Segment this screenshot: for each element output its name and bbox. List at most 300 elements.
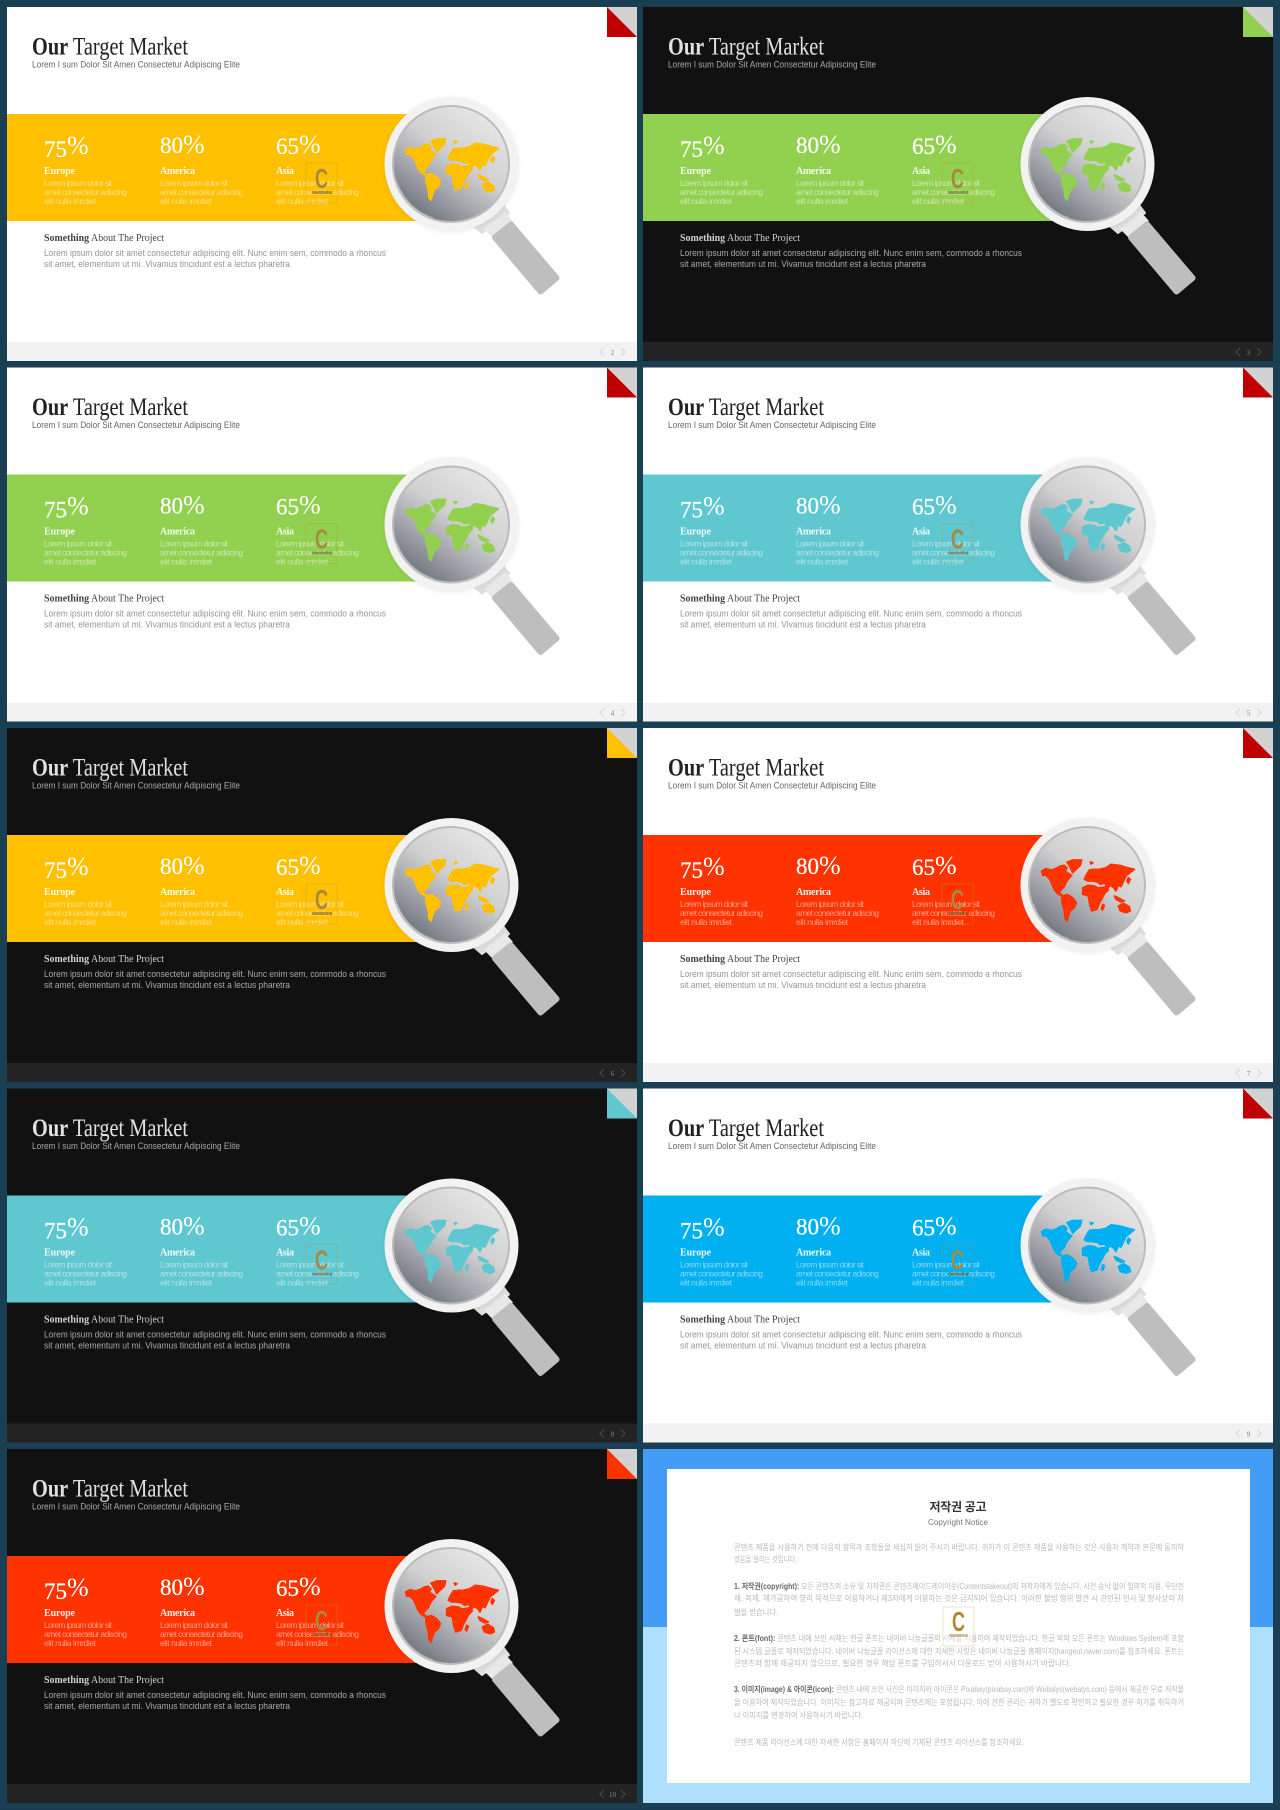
stat: America <box>160 1212 243 1288</box>
subheading: Lorem I sum Dolor Sit Amen Consectetur Adipiscing Elite <box>32 1502 240 1512</box>
watermark: C <box>315 1244 328 1276</box>
stat: Europe: Lorem ipsum dolor sit <box>44 1260 113 1270</box>
stat: Asia: % <box>299 1212 321 1240</box>
colour band <box>7 835 427 942</box>
corner fold <box>607 728 637 758</box>
project text: Lorem ipsum dolor sit amet consectetur adipiscing elit. Nunc enim sem, commodo a rhoncus <box>44 1690 386 1701</box>
stat: America: Lorem ipsum dolor sit <box>160 538 229 548</box>
stat: Asia: 65 <box>276 855 299 880</box>
corner fold <box>1243 7 1273 37</box>
stat: Europe <box>44 131 127 206</box>
project text <box>680 969 1022 991</box>
stat: Asia: Asia <box>276 1608 294 1619</box>
colour band <box>7 1196 427 1302</box>
project text: sit amet, elementum ut mi. Vivamus tincidunt est a lectus pharetra <box>44 259 291 270</box>
stat: Europe: 75 <box>44 137 67 162</box>
stat: Europe: Lorem ipsum dolor sit <box>44 178 113 188</box>
corner fold <box>607 7 637 37</box>
stat: Asia <box>912 851 995 927</box>
project text <box>44 1690 386 1712</box>
stat: Europe: elit nulla imrdiet <box>680 196 733 206</box>
footer with page number <box>643 1063 1273 1082</box>
watermark <box>306 884 337 924</box>
watermark: C <box>315 524 328 554</box>
slide 3: dark green <box>643 7 1273 361</box>
stat: America: elit nulla imrdiet <box>796 917 849 927</box>
section 3: image and icon: 을 이용하여 제작되었습니다. 이미지는 참고자료 제공되며 콘텐츠에는 포함됩니다. 이에 관한 권리는 귀하가 별도로 확인하고 필요한 경우 허가를 취득하거 <box>734 1697 1184 1707</box>
stat: Europe: % <box>67 1212 89 1242</box>
watermark: C <box>315 163 328 194</box>
stat: Europe: % <box>703 1212 725 1242</box>
project heading: Something About The Project <box>680 954 800 965</box>
stat: America: Lorem ipsum dolor sit <box>796 899 865 909</box>
heading: Our Target Market <box>32 754 188 782</box>
section 3: image and icon: 나 이미지를 변경하여 사용하시기 바랍니다. <box>734 1710 863 1720</box>
stat: Europe: Europe <box>44 1248 76 1258</box>
project text: Lorem ipsum dolor sit amet consectetur adipiscing elit. Nunc enim sem, commodo a rhoncus <box>680 248 1022 259</box>
stat: Asia: 65 <box>276 494 299 520</box>
subheading: Lorem I sum Dolor Sit Amen Consectetur Adipiscing Elite <box>32 780 240 790</box>
stat: Asia: amet consectetur adiscing <box>276 187 359 197</box>
stat: America: America <box>796 526 831 538</box>
stat: America: Lorem ipsum dolor sit <box>160 899 229 909</box>
stat: America: Lorem ipsum dolor sit <box>796 538 865 548</box>
stat: Asia <box>276 1572 359 1648</box>
project text <box>44 969 386 991</box>
watermark <box>306 524 337 564</box>
corner fold <box>1243 1088 1273 1118</box>
stat: America: Lorem ipsum dolor sit <box>160 1620 229 1630</box>
stat: Europe: % <box>703 492 725 520</box>
slide 10: dark orange-red <box>7 1449 637 1803</box>
section 1: copyright: 벌을 받습니다. <box>734 1607 778 1617</box>
stat: America: Lorem ipsum dolor sit <box>796 178 865 188</box>
stat: Asia: 65 <box>912 494 935 520</box>
subheading: Lorem I sum Dolor Sit Amen Consectetur Adipiscing Elite <box>668 1141 876 1151</box>
stat: Europe: elit nulla imrdiet <box>680 1278 733 1288</box>
stat: Europe: Europe <box>680 887 712 898</box>
stat: Europe: Europe <box>680 526 712 538</box>
stat: Asia: amet consectetur adiscing <box>912 548 995 558</box>
intro paragraph: 셨음을 알리는 것입니다. <box>734 1554 797 1564</box>
project text: sit amet, elementum ut mi. Vivamus tincidunt est a lectus pharetra <box>680 980 927 991</box>
watermark: C <box>951 884 964 915</box>
stat: America: elit nulla imrdiet <box>796 556 849 566</box>
stat: Asia: amet consectetur adiscing <box>276 1268 359 1278</box>
stat: Asia: Asia <box>912 1248 930 1258</box>
watermark <box>306 1605 337 1645</box>
stat: America: 80% <box>160 130 205 159</box>
footer with page number: 8 <box>611 1430 615 1438</box>
copyright notice slide <box>643 1449 1273 1803</box>
notice subtitle: Copyright Notice <box>928 1517 988 1527</box>
stat: America: America <box>160 166 195 177</box>
intro paragraph: 콘텐츠 제품을 사용하기 전에 다음의 항목과 조항들을 세심히 읽어 주시기 바랍니다. 귀하가 이 콘텐츠 제품을 사용하는 것은 사용자 계약과 본문에 동의하 <box>734 1542 1185 1552</box>
magnifier with world map <box>1020 1178 1192 1373</box>
stat: Europe: amet consectetur adiscing <box>680 908 763 918</box>
stat: Europe: amet consectetur adiscing <box>44 908 127 918</box>
stat: America: elit nulla imrdiet <box>160 917 213 927</box>
section 1: copyright: 1. 저작권(copyright): 모든 콘텐츠의 소유 및 저작권은 콘텐츠메이드레이아웃(Contentstakeout)의 저작자에게 있습니다. 사전 승낙 없이 임의적 이용, 무단전 <box>734 1581 1184 1591</box>
subheading: Lorem I sum Dolor Sit Amen Consectetur Adipiscing Elite <box>668 420 876 430</box>
closing line: 콘텐츠 제품 라이선스에 대한 자세한 사항은 홈페이지 하단에 기재된 콘텐츠 라이선스를 참조하세요. <box>734 1737 1024 1747</box>
heading: Our Target Market <box>32 1476 188 1502</box>
stat: Europe: elit nulla imrdiet <box>44 1638 97 1648</box>
project text <box>680 248 1022 270</box>
section 3: image and icon: 3. 이미지(image) & 아이콘(icon): 콘텐츠 내에 쓰인 사진은 이미지와 아이콘은 Pixabay(pixabay.com)와 Webalys(webalys.com) 등에서 제공한 무료 저작물 <box>734 1684 1184 1694</box>
stat: Asia: Asia <box>912 526 930 538</box>
colour band <box>643 1196 1063 1302</box>
stat: Asia <box>276 1212 359 1288</box>
project text: Lorem ipsum dolor sit amet consectetur adipiscing elit. Nunc enim sem, commodo a rhoncus <box>680 969 1022 980</box>
footer with page number <box>643 702 1273 722</box>
stat: America: elit nulla imrdiet <box>796 196 849 206</box>
stat: Europe: 75 <box>44 1218 67 1244</box>
stat: Asia: amet consectetur adiscing <box>276 908 359 918</box>
footer with page number <box>7 342 637 361</box>
project text <box>680 1330 1022 1352</box>
footer with page number <box>7 702 637 722</box>
corner fold <box>607 1088 637 1118</box>
notice panel <box>667 1469 1250 1783</box>
colour band <box>643 835 1063 942</box>
stat: America <box>796 130 879 206</box>
stat: Europe: amet consectetur adiscing <box>44 1268 127 1278</box>
corner fold <box>1243 368 1273 398</box>
stat: Europe: amet consectetur adiscing <box>680 548 763 558</box>
stat: Asia: elit nulla imrdiet <box>276 1638 329 1648</box>
project text: Lorem ipsum dolor sit amet consectetur adipiscing elit. Nunc enim sem, commodo a rhoncus <box>44 969 386 980</box>
footer with page number: 9 <box>1247 1430 1251 1438</box>
watermark: C <box>952 1606 965 1637</box>
stat: Asia: Lorem ipsum dolor sit <box>276 1260 345 1270</box>
stat: Asia: Lorem ipsum dolor sit <box>912 178 981 188</box>
heading: Our Target Market <box>668 1115 824 1142</box>
project heading: Something About The Project <box>680 1314 800 1326</box>
stat: Europe: 75 <box>44 1579 67 1604</box>
heading: Our Target Market <box>32 34 188 60</box>
stat: Europe: elit nulla imrdiet <box>680 917 733 927</box>
stat: America <box>796 851 879 927</box>
stat: America: 80% <box>160 851 205 880</box>
stat: Europe: amet consectetur adiscing <box>44 548 127 558</box>
stat: America: America <box>796 166 831 177</box>
stat: America: 80% <box>796 851 841 880</box>
stat: Europe: 75 <box>680 858 703 883</box>
watermark: C <box>315 1605 328 1636</box>
stat: Asia: elit nulla imrdiet <box>912 917 965 927</box>
stat: America: 80% <box>160 1212 205 1240</box>
stat: Europe: elit nulla imrdiet <box>44 1278 97 1288</box>
stat: Europe: Europe <box>680 1248 712 1258</box>
section 3: image and icon <box>734 1684 1184 1720</box>
watermark <box>942 1244 973 1284</box>
project text: Lorem ipsum dolor sit amet consectetur adipiscing elit. Nunc enim sem, commodo a rhoncus <box>44 1330 386 1340</box>
stat: Asia: % <box>299 130 321 159</box>
footer with page number <box>7 1063 637 1082</box>
stat: Asia: elit nulla imrdiet <box>276 917 329 927</box>
stat: Asia: Asia <box>276 526 294 538</box>
footer with page number: 10 <box>609 1791 616 1799</box>
project heading: Something About The Project <box>44 233 164 244</box>
stat: Europe: 75 <box>680 137 703 162</box>
stat: Asia: % <box>935 851 957 880</box>
project heading: Something About The Project <box>680 233 800 244</box>
slide 9: white blue <box>643 1088 1273 1442</box>
project heading: Something About The Project <box>44 594 164 604</box>
stat: Europe: % <box>67 492 89 520</box>
heading: Our Target Market <box>668 754 824 782</box>
stat: Asia: amet consectetur adiscing <box>912 908 995 918</box>
stat: Europe: elit nulla imrdiet <box>44 556 97 566</box>
stat: America: America <box>160 1248 195 1258</box>
stat: Europe: % <box>703 852 725 881</box>
stat: Europe: % <box>67 1573 89 1602</box>
slide 7: white orange-red <box>643 728 1273 1082</box>
section 2: font <box>734 1633 1185 1668</box>
stat: Europe: Europe <box>680 166 712 177</box>
stat: Asia: % <box>935 130 957 159</box>
stat: America: elit nulla imrdiet <box>796 1278 849 1288</box>
stat: America <box>160 490 243 566</box>
stat: Asia: % <box>299 490 321 520</box>
stat: Asia <box>912 130 995 206</box>
stat: Asia: Lorem ipsum dolor sit <box>276 1620 345 1630</box>
stat: Asia <box>912 1212 995 1288</box>
stat: Asia: 65 <box>912 134 935 159</box>
stat: America: America <box>796 1248 831 1258</box>
stat: Asia: 65 <box>276 134 299 159</box>
slide 6: dark yellow <box>7 728 637 1082</box>
two-tone background <box>643 1449 1273 1803</box>
stat: Asia: % <box>935 490 957 520</box>
stat: Europe: amet consectetur adiscing <box>44 1629 127 1639</box>
project heading: Something About The Project <box>44 1675 164 1686</box>
stat: Europe: elit nulla imrdiet <box>44 196 97 206</box>
stat: America <box>796 490 879 566</box>
stat: America: amet consectetur adiscing <box>796 187 879 197</box>
stat: Europe <box>44 1212 127 1288</box>
stat: Asia <box>276 490 359 566</box>
footer with page number: 5 <box>1247 710 1251 718</box>
stat: America: America <box>160 1608 195 1619</box>
stat: Asia: elit nulla imrdiet <box>912 556 965 566</box>
stat: Europe: Europe <box>44 1608 76 1619</box>
stat: America: America <box>160 526 195 538</box>
subheading: Lorem I sum Dolor Sit Amen Consectetur Adipiscing Elite <box>668 60 876 70</box>
magnifier with world map <box>1020 97 1192 292</box>
stat: America: amet consectetur adiscing <box>160 548 243 558</box>
intro paragraph <box>734 1542 1185 1564</box>
project heading: Something About The Project <box>680 594 800 604</box>
footer with page number <box>7 1424 637 1442</box>
stat: America: 80% <box>160 490 205 520</box>
subheading: Lorem I sum Dolor Sit Amen Consectetur Adipiscing Elite <box>32 60 240 70</box>
stat: America: America <box>796 887 831 898</box>
colour band <box>7 474 427 582</box>
watermark <box>943 1606 974 1646</box>
stat: Europe <box>680 852 763 927</box>
stat: Europe: elit nulla imrdiet <box>44 917 97 927</box>
footer with page number: 2 <box>611 349 615 357</box>
stat: Europe: Europe <box>44 887 76 898</box>
stat: Europe: Lorem ipsum dolor sit <box>44 538 113 548</box>
stat: Europe: % <box>67 852 89 881</box>
stat: Asia <box>912 490 995 566</box>
stat: Europe <box>44 852 127 927</box>
heading: Our Target Market <box>668 394 824 421</box>
section 1: copyright <box>734 1581 1184 1617</box>
stat: America: America <box>160 887 195 898</box>
project text: sit amet, elementum ut mi. Vivamus tincidunt est a lectus pharetra <box>44 620 291 630</box>
stat: Europe: 75 <box>680 1218 703 1244</box>
stat: Asia: Lorem ipsum dolor sit <box>276 538 345 548</box>
heading: Our Target Market <box>32 394 188 421</box>
subheading: Lorem I sum Dolor Sit Amen Consectetur Adipiscing Elite <box>32 1141 240 1151</box>
section 2: font: 된 시스템 글꼴로 제작되었습니다. 네이버 나눔글꼴 라이선스에 대한 자세한 사항은 네이버 나눔글꼴 홈페이지(hangeul.naver.com)를 참조하세요. 폰트는 <box>734 1646 1184 1656</box>
stat: America: Lorem ipsum dolor sit <box>160 178 229 188</box>
section 1: copyright: 재, 복제, 재가공하여 영리 목적으로 이용하거나 제3자에게 이용하는 것은 금지되어 있습니다. 이러한 불법 행위 발견 시 관련된 민사 및 형사상의 처 <box>734 1593 1184 1603</box>
stat: Asia <box>276 851 359 927</box>
watermark <box>306 1244 337 1284</box>
stat: Europe: % <box>703 131 725 160</box>
corner fold <box>607 368 637 398</box>
footer with page number <box>7 1784 637 1803</box>
stat: Asia: Lorem ipsum dolor sit <box>912 899 981 909</box>
magnifier with world map <box>384 818 556 1012</box>
stat: Europe: Lorem ipsum dolor sit <box>680 538 749 548</box>
stat: America: amet consectetur adiscing <box>796 548 879 558</box>
colour band <box>7 1556 427 1663</box>
stat: America: elit nulla imrdiet <box>160 1278 213 1288</box>
stat: Asia: % <box>935 1212 957 1240</box>
stat: Asia: Asia <box>276 887 294 898</box>
subheading: Lorem I sum Dolor Sit Amen Consectetur Adipiscing Elite <box>32 420 240 430</box>
magnifier with world map <box>384 1539 556 1734</box>
stat: Europe <box>680 131 763 206</box>
stat: America: amet consectetur adiscing <box>796 1268 879 1278</box>
heading: Our Target Market <box>668 34 824 60</box>
stat: Asia: elit nulla imrdiet <box>276 1278 329 1288</box>
stat: America: 80% <box>796 130 841 159</box>
stat: Asia <box>276 130 359 206</box>
section 2: font: 콘텐츠와 함께 제공되지 않으므로, 필요한 경우 해당 폰트를 구입하셔서 다운로드 받아 사용하시기 바랍니다. <box>734 1658 1071 1668</box>
stat: Asia: amet consectetur adiscing <box>276 1629 359 1639</box>
stat: America: 80% <box>796 1212 841 1240</box>
project text <box>44 248 386 270</box>
stat: Asia: Asia <box>912 887 930 898</box>
stat: Asia: Asia <box>912 166 930 177</box>
project text: Lorem ipsum dolor sit amet consectetur adipiscing elit. Nunc enim sem, commodo a rhoncus <box>680 608 1022 620</box>
colour band <box>643 114 1063 221</box>
footer with page number: 4 <box>611 710 615 718</box>
stat: America: 80% <box>796 490 841 520</box>
stat: Europe: Europe <box>44 526 76 538</box>
stat: Asia: elit nulla imrdiet <box>276 556 329 566</box>
footer with page number: 6 <box>611 1070 615 1078</box>
stat: America: amet consectetur adiscing <box>160 1629 243 1639</box>
project text <box>44 1330 386 1352</box>
project text: sit amet, elementum ut mi. Vivamus tincidunt est a lectus pharetra <box>680 1340 927 1352</box>
watermark: C <box>951 1244 964 1276</box>
stat: Europe: Europe <box>44 166 76 177</box>
stat: Europe <box>680 1212 763 1288</box>
stat: Asia: amet consectetur adiscing <box>912 187 995 197</box>
stat: America <box>160 130 243 206</box>
stat: America: Lorem ipsum dolor sit <box>796 1260 865 1270</box>
stat: Europe: Lorem ipsum dolor sit <box>44 1620 113 1630</box>
stat: Asia: Asia <box>276 166 294 177</box>
stat: Europe <box>44 492 127 566</box>
heading: Our Target Market <box>32 1115 188 1142</box>
watermark <box>306 163 337 203</box>
stat: America: elit nulla imrdiet <box>160 196 213 206</box>
project heading: Something About The Project <box>44 954 164 965</box>
stat: Asia: Lorem ipsum dolor sit <box>276 899 345 909</box>
stat: Europe: amet consectetur adiscing <box>44 187 127 197</box>
footer with page number <box>643 1424 1273 1442</box>
watermark: C <box>951 163 964 194</box>
stat: Asia: amet consectetur adiscing <box>912 1268 995 1278</box>
stat: Europe: Lorem ipsum dolor sit <box>44 899 113 909</box>
colour band <box>643 474 1063 582</box>
project text: sit amet, elementum ut mi. Vivamus tincidunt est a lectus pharetra <box>680 259 927 270</box>
project heading: Something About The Project <box>44 1314 164 1326</box>
stat: Asia: Lorem ipsum dolor sit <box>276 178 345 188</box>
watermark <box>942 884 973 924</box>
stat: Europe <box>680 492 763 566</box>
project text: sit amet, elementum ut mi. Vivamus tincidunt est a lectus pharetra <box>680 620 927 630</box>
stat: Asia: elit nulla imrdiet <box>912 196 965 206</box>
stat: Asia: 65 <box>276 1216 299 1240</box>
stat: America: amet consectetur adiscing <box>160 187 243 197</box>
stat: Asia: elit nulla imrdiet <box>912 1278 965 1288</box>
stat: Asia: 65 <box>912 855 935 880</box>
project text: Lorem ipsum dolor sit amet consectetur adipiscing elit. Nunc enim sem, commodo a rhoncus <box>680 1330 1022 1340</box>
watermark <box>942 163 973 203</box>
stat: Europe: 75 <box>44 498 67 522</box>
colour band <box>7 114 427 221</box>
stat: Europe: amet consectetur adiscing <box>680 187 763 197</box>
stat: Europe: elit nulla imrdiet <box>680 556 733 566</box>
stat: Europe: % <box>67 131 89 160</box>
footer with page number <box>643 342 1273 361</box>
stat: Asia: Lorem ipsum dolor sit <box>912 538 981 548</box>
slide 5: white teal <box>643 368 1273 722</box>
stat: Asia: Lorem ipsum dolor sit <box>912 1260 981 1270</box>
stat: America: Lorem ipsum dolor sit <box>160 1260 229 1270</box>
stat: America: amet consectetur adiscing <box>796 908 879 918</box>
stat: America <box>160 1572 243 1648</box>
project text: sit amet, elementum ut mi. Vivamus tincidunt est a lectus pharetra <box>44 1340 291 1352</box>
stat: Europe: Lorem ipsum dolor sit <box>680 1260 749 1270</box>
stat: America <box>796 1212 879 1288</box>
stat: Asia: amet consectetur adiscing <box>276 548 359 558</box>
magnifier with world map <box>1020 818 1192 1012</box>
stat: Asia: Asia <box>276 1248 294 1258</box>
magnifier with world map <box>384 458 556 652</box>
stat: America: 80% <box>160 1572 205 1601</box>
stat: America: elit nulla imrdiet <box>160 1638 213 1648</box>
stat: Europe: Lorem ipsum dolor sit <box>680 899 749 909</box>
project text: Lorem ipsum dolor sit amet consectetur adipiscing elit. Nunc enim sem, commodo a rhoncus <box>44 248 386 259</box>
project text <box>44 608 386 630</box>
stat: America: elit nulla imrdiet <box>160 556 213 566</box>
stat: Asia: % <box>299 851 321 880</box>
corner fold <box>1243 728 1273 758</box>
stat: Europe: 75 <box>680 498 703 522</box>
stat: Europe <box>44 1573 127 1648</box>
